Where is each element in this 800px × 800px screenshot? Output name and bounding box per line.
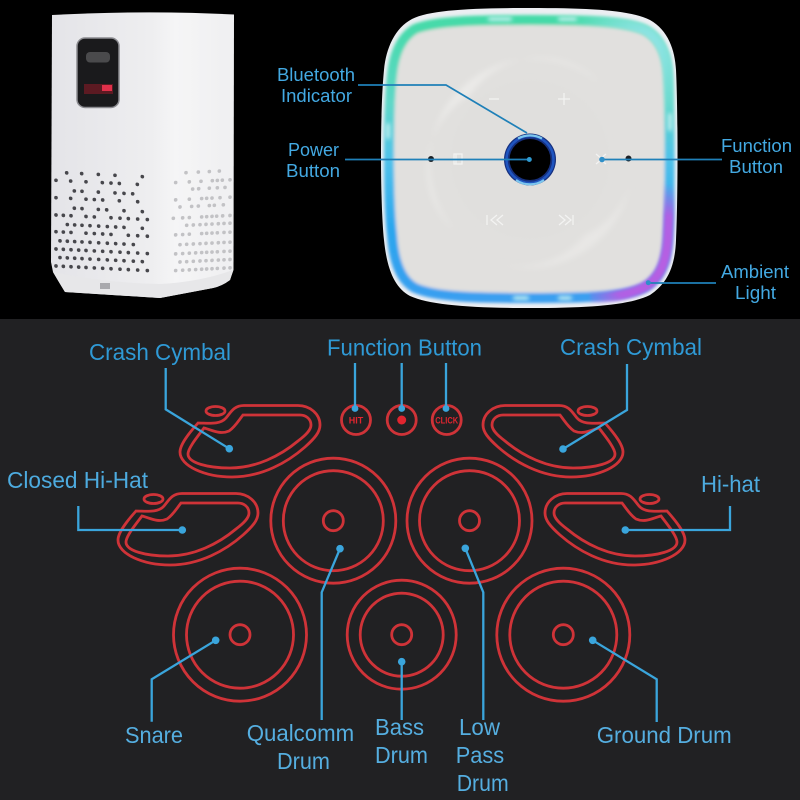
display window — [77, 38, 119, 108]
front perforations — [56, 172, 147, 271]
outer shell — [381, 8, 678, 308]
crash cymbal right pad — [483, 406, 623, 477]
callout: bluetooth indicator — [277, 65, 527, 133]
callout: bluetooth indicator: Bluetooth — [277, 65, 355, 85]
icon: previous — [487, 215, 503, 225]
callout: function button: Function — [721, 136, 792, 156]
label: low pass drum: Low — [459, 714, 500, 740]
device photo: speaker side view — [51, 12, 234, 298]
callout: function button: Button — [729, 157, 783, 177]
icon: minus — [489, 98, 499, 100]
control dish lower crescent — [470, 185, 630, 268]
function button hole — [626, 156, 632, 162]
bluetooth indicator — [504, 134, 556, 186]
crash cymbal left pad — [180, 406, 320, 477]
LED ring cyan corner — [530, 20, 670, 235]
label: low pass drum: Drum — [457, 770, 509, 796]
label: low pass drum: Pass — [456, 742, 504, 768]
qualcomm drum pad — [271, 458, 396, 583]
control dish crescent — [427, 58, 600, 230]
label: closed hi-hat: Closed Hi-Hat — [7, 467, 149, 493]
label: bass drum — [375, 658, 428, 768]
callout: ambient light: Ambient — [721, 262, 789, 282]
callout: power button — [286, 140, 532, 181]
bass drum pad — [347, 580, 456, 689]
HIT button: HIT — [349, 416, 364, 426]
callout: function button — [599, 136, 792, 177]
label: crash cymbal left — [89, 339, 233, 453]
speaker top view with LED ring — [381, 8, 678, 308]
closed hi-hat pad — [118, 494, 258, 565]
label: qualcomm drum: Drum — [277, 748, 330, 774]
LED ring purple corner — [590, 170, 669, 298]
centre button — [387, 406, 416, 434]
icon: plus — [558, 93, 570, 105]
label: snare: Snare — [125, 722, 183, 748]
hi-hat pad — [545, 494, 685, 565]
speaker body — [51, 12, 234, 298]
base label — [100, 283, 110, 289]
label: function button — [327, 334, 482, 412]
CLICK button: CLICK — [435, 416, 459, 426]
label: ground drum — [589, 636, 732, 748]
label: low pass drum — [456, 544, 509, 796]
callout: ambient light: Light — [735, 283, 776, 303]
label: closed hi-hat — [7, 467, 186, 534]
ground drum pad — [497, 568, 630, 701]
power button hole — [428, 156, 434, 162]
label: bass drum: Drum — [375, 742, 428, 768]
callout: power button: Power — [288, 140, 339, 160]
label: crash cymbal left: Crash Cymbal — [89, 339, 231, 365]
icon: left mode — [454, 154, 462, 164]
label: crash cymbal right: Crash Cymbal — [560, 334, 702, 360]
speaker base band — [53, 270, 233, 298]
icon: right mode — [596, 154, 606, 164]
drum pad outlines — [118, 406, 685, 701]
low pass drum pad — [407, 458, 532, 583]
LED ring base colour — [389, 20, 670, 298]
label: ground drum: Ground Drum — [597, 722, 732, 748]
label: hi-hat: Hi-hat — [701, 471, 761, 497]
label: hi-hat — [622, 471, 761, 534]
label: snare — [125, 636, 220, 748]
upper display slot — [86, 52, 110, 62]
callout: bluetooth indicator: Indicator — [281, 86, 352, 106]
label: qualcomm drum — [247, 545, 354, 774]
snare pad — [174, 568, 306, 701]
label: qualcomm drum: Qualcomm — [247, 720, 354, 746]
top black background — [0, 0, 800, 319]
label: function button: Function Button — [327, 334, 482, 360]
callout: power button: Button — [286, 161, 340, 181]
side perforations — [173, 170, 230, 271]
bottom dark panel background — [0, 319, 800, 800]
control dish inner — [451, 80, 609, 238]
icon: next — [559, 215, 573, 225]
label: crash cymbal right — [559, 334, 702, 453]
callout: ambient light — [646, 262, 789, 303]
function buttons — [342, 406, 461, 434]
red indicator — [84, 84, 113, 94]
button icons — [454, 93, 606, 225]
label: bass drum: Bass — [375, 714, 424, 740]
LED ring highlights — [388, 19, 670, 298]
